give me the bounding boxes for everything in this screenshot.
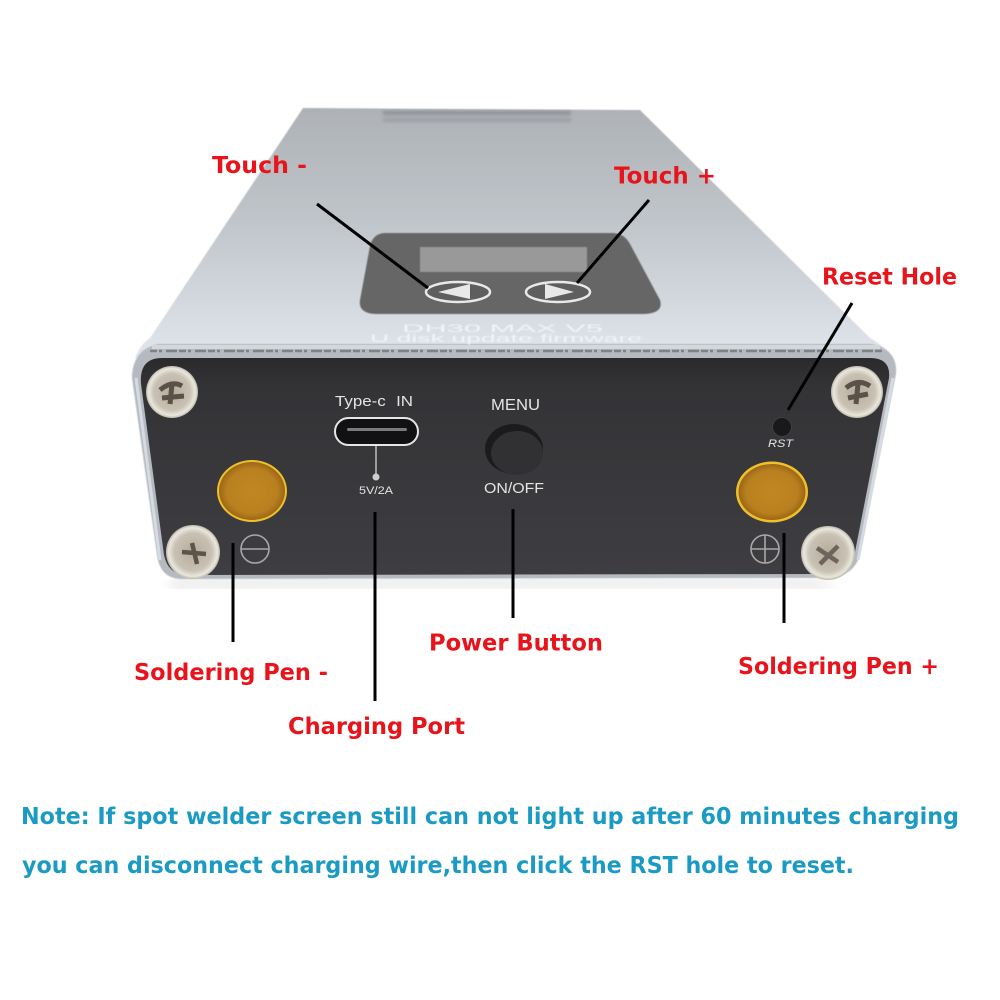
model text: DH30 MAX V5 [402,323,603,335]
icon: power knob [485,424,543,475]
5V/2A text: 5V/2A [359,485,394,497]
icon: minus symbol [241,535,269,563]
label: Charging Port: Charging Port [288,712,465,740]
silver front frame [132,344,896,579]
MENU text: MENU [491,397,540,414]
icon: USB-C port [335,418,418,480]
icon: plus symbol [751,535,779,563]
model text [370,323,642,345]
note text: you can disconnect charging wire,then click the RST hole to reset. [22,851,854,879]
arrow: Charging Port [374,512,376,701]
label: Soldering Pen -: Soldering Pen - [134,658,328,686]
front edge band [152,345,880,349]
icon: screw top-left [146,366,198,418]
arrow: Soldering Pen plus [782,533,786,623]
arrow: Touch plus [577,200,649,283]
icon: screw bottom-left [166,525,220,579]
arrow: Soldering Pen minus [232,543,234,642]
icon: reset hole [772,418,792,436]
Type-c IN text: Type-c IN [335,393,413,410]
label: Touch +: Touch + [614,162,716,190]
note text: Note: If spot welder screen still can not light up after 60 minutes charging [21,802,959,830]
note text [21,802,959,879]
arrow: Reset Hole [788,303,852,410]
arrow: Touch minus [317,204,428,288]
soldering socket positive [736,462,808,522]
faint top label [383,111,571,122]
arrow: Power Button [512,509,514,618]
label: Reset Hole: Reset Hole [822,262,957,290]
control panel on top face [360,233,661,314]
OLED screen [420,247,587,272]
ON/OFF text: ON/OFF [484,480,544,497]
icon: right touch button [526,282,590,302]
icon: left touch button [426,282,490,302]
device body [132,108,896,588]
soldering socket negative [217,460,287,522]
RST text: RST [768,438,794,450]
top face [135,108,892,358]
pointer lines [233,200,852,701]
label: Touch -: Touch - [212,151,307,179]
label: Soldering Pen +: Soldering Pen + [738,652,939,680]
front edge texture [150,350,884,352]
icon: screw bottom-right [801,526,855,580]
dark front panel [141,358,889,575]
icon: screw top-right [831,366,883,418]
model text: U disk update firmware [370,333,642,345]
floor shadow [170,580,840,588]
label: Power Button: Power Button [429,628,603,656]
